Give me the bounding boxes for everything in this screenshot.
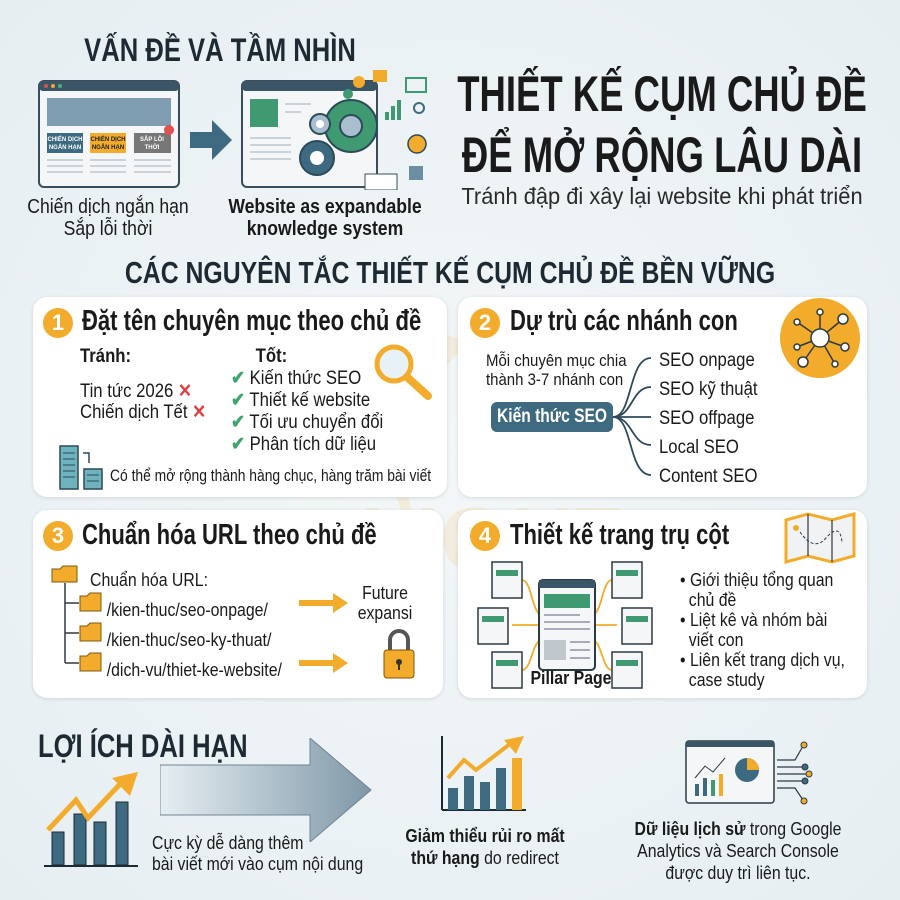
panel 1 title: Đặt tên chuyên mục theo chủ đề — [82, 305, 421, 337]
text: historical data — [635, 819, 841, 883]
url labels: /kien-thuc/seo-ky-thuat/ — [107, 630, 271, 650]
avoid list — [80, 346, 206, 423]
badge 2: 2 — [479, 310, 491, 335]
text: easy to add: bài viết mới vào cụm nội dung — [152, 854, 363, 874]
branch items: SEO onpage — [659, 350, 755, 371]
url labels: /kien-thuc/seo-onpage/ — [107, 600, 268, 620]
caption: expandable system — [228, 196, 422, 240]
badge 3 — [43, 521, 73, 551]
icon: lock — [384, 629, 414, 678]
panel 1: naming — [33, 297, 447, 497]
badge 1 — [43, 308, 73, 338]
url labels: /dich-vu/thiet-ke-website/ — [107, 660, 282, 680]
branch items: SEO kỹ thuật — [659, 379, 758, 400]
good list: ✔ Tối ưu chuyển đổi — [231, 412, 383, 433]
text: reduce risk: Giảm thiểu rủi ro mất — [405, 826, 565, 846]
text: future expansion: Future — [362, 583, 408, 603]
badge 1: 1 — [52, 310, 64, 335]
branch items: Content SEO — [659, 466, 758, 487]
icon: growth chart middle — [441, 736, 526, 811]
text: future expansion: expansi — [358, 603, 412, 623]
badge 4: 4 — [479, 523, 491, 548]
avoid list: Tránh: — [80, 346, 131, 367]
illustration: outdated browser: NGẮN HẠN — [49, 143, 81, 151]
bullet list: • Liên kết trang dịch vụ, — [680, 650, 845, 670]
big arrow — [160, 738, 372, 842]
watermark logo — [360, 336, 620, 590]
url labels — [90, 570, 282, 680]
text: future expansion — [358, 583, 412, 623]
branch items — [659, 350, 758, 487]
text: easy to add: Cực kỳ dễ dàng thêm — [152, 833, 303, 853]
url labels: Chuẩn hóa URL: — [90, 570, 208, 590]
url tree — [52, 566, 102, 672]
panel 2: branches — [458, 297, 867, 497]
subtitle: Tránh đập đi xây lại website khi phát triển — [461, 183, 863, 209]
caption: expandable system: knowledge system — [247, 218, 403, 240]
bullet list: • Liệt kê và nhóm bài — [680, 610, 827, 630]
text: reduce risk — [405, 826, 565, 868]
text: reduce risk: thứ hạng do redirect — [411, 848, 559, 868]
good list: ✔ Thiết kế website — [231, 390, 370, 411]
good list: ✔ Phân tích dữ liệu — [231, 434, 376, 455]
arrow: future — [299, 593, 348, 613]
badge 2 — [470, 308, 500, 338]
branch items: SEO offpage — [659, 408, 754, 429]
arrow: transition — [190, 120, 232, 160]
good list: ✔ Kiến thức SEO — [231, 368, 361, 389]
label: Pillar Page: Pillar Page — [530, 668, 612, 688]
illustration: outdated browser: THỜI — [145, 143, 160, 151]
bullet list: • Giới thiệu tổng quan — [680, 570, 833, 590]
avoid list: Tin tức 2026 ✕ — [80, 381, 192, 402]
main title: ĐỂ MỞ RỘNG LÂU DÀI — [462, 127, 862, 183]
pill: Kien thuc SEO — [491, 402, 613, 432]
caption: short-term campaign — [27, 195, 189, 240]
branch items: Local SEO — [659, 437, 739, 458]
icon: magnifier — [374, 344, 432, 400]
illustration: expandable knowledge system — [241, 70, 427, 190]
caption: short-term campaign: Sắp lỗi thời — [64, 218, 152, 240]
panel 3 title: Chuẩn hóa URL theo chủ đề — [82, 519, 377, 551]
description: Mỗi chuyên mục chia — [486, 351, 627, 370]
panel 4 title: Thiết kế trang trụ cột — [510, 519, 729, 551]
text: historical data: Analytics và Search Console — [637, 841, 839, 861]
illustration: outdated browser — [38, 80, 180, 188]
main title: THIẾT KẾ CỤM CHỦ ĐỀ — [457, 66, 867, 122]
panel 2 title: Dự trù các nhánh con — [510, 305, 738, 337]
arrow: lock — [299, 653, 348, 673]
panel 4: pillar page — [458, 510, 867, 698]
note: Có thể mở rộng thành hàng chục, hàng trăm bài viết — [110, 467, 431, 485]
pill label: Kiến thức SEO — [497, 406, 607, 427]
bullet list: case study — [689, 670, 765, 690]
panel 3: URLs — [33, 510, 443, 698]
heading: van de va tam nhin: VẤN ĐỀ VÀ TẦM NHÌN — [84, 32, 356, 68]
illustration: outdated browser: NGẮN HẠN — [92, 143, 124, 151]
icon: documents — [59, 445, 103, 490]
avoid list: Chiến dịch Tết ✕ — [80, 402, 206, 423]
illustration: outdated browser: CHIẾN DỊCH — [47, 136, 83, 143]
description: thành 3-7 nhánh con — [486, 370, 623, 389]
bullet list — [680, 570, 845, 690]
text: historical data: được duy trì liên tục. — [665, 863, 811, 883]
bullet list: viết con — [689, 630, 743, 650]
section heading: CÁC NGUYÊN TẮC THIẾT KẾ CỤM CHỦ ĐỀ BỀN VỮNG — [125, 255, 775, 290]
caption: short-term campaign: Chiến dịch ngắn hạn — [27, 196, 189, 218]
icon: analytics dashboard — [685, 740, 812, 804]
text: historical data: Dữ liệu lịch sử trong Google — [635, 819, 841, 839]
good list: Tốt: — [256, 346, 287, 367]
icon: map — [784, 512, 856, 564]
badge 3: 3 — [52, 523, 64, 548]
main title — [457, 66, 867, 183]
bullet list: chủ đề — [689, 590, 736, 610]
illustration: outdated browser: CHIẾN DỊCH — [90, 136, 126, 143]
text: easy to add — [152, 832, 363, 874]
badge 4 — [470, 521, 500, 551]
description — [486, 351, 627, 389]
good list — [231, 346, 383, 455]
icon: network — [780, 298, 860, 378]
illustration: outdated browser: SẮP LỖI — [140, 135, 164, 143]
icon: growth chart left — [44, 772, 138, 867]
branch lines — [613, 357, 651, 476]
heading: long-term benefits: LỢI ÍCH DÀI HẠN — [38, 728, 248, 764]
caption: expandable system: Website as expandable — [228, 196, 422, 218]
diagram: pillar page hub — [477, 561, 653, 689]
